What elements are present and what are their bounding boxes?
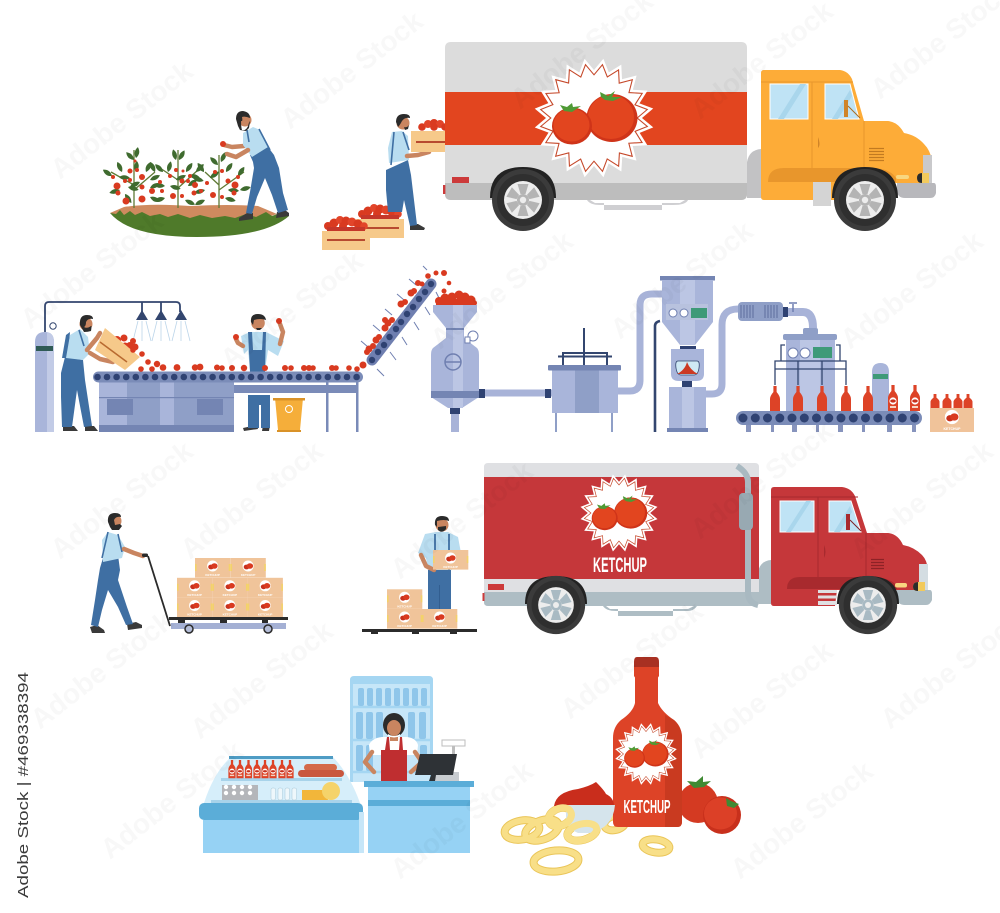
scene: worker stacking boxes — [362, 516, 477, 634]
inclined conveyor — [361, 266, 451, 376]
water bottles — [271, 788, 296, 800]
tomato logo badge — [525, 49, 663, 187]
worker holding box — [418, 516, 461, 610]
loading worker — [386, 114, 429, 230]
adobe stock watermark: Adobe Stock — [385, 755, 539, 885]
crate held by worker — [411, 119, 445, 152]
washing vessel with hopper — [431, 290, 552, 432]
mixing tank — [545, 328, 621, 432]
pallet cart — [169, 617, 288, 633]
tomato logo badge — [574, 468, 664, 558]
adobe stock watermark: Adobe Stock — [685, 635, 839, 765]
cab step — [813, 182, 831, 206]
tomatoes beside bottle — [678, 776, 741, 834]
drinks fridge — [350, 676, 433, 782]
adobe stock watermark: Adobe Stock — [425, 225, 579, 355]
cargo box — [482, 463, 759, 606]
grass — [110, 210, 289, 237]
scene: ketchup bottle with onion rings — [503, 657, 741, 873]
filter unit — [738, 302, 788, 321]
chassis link — [747, 149, 761, 198]
outlet pipe — [479, 390, 552, 396]
product cylinder — [872, 363, 889, 411]
recycling bin — [273, 398, 305, 432]
adobe stock watermark: Adobe Stock — [725, 755, 879, 885]
egg trays — [222, 785, 258, 800]
sorting worker — [233, 314, 284, 431]
truck: grey and orange tomato truck — [443, 42, 936, 231]
tomatoes on incline — [364, 270, 451, 355]
stacked ketchup boxes — [177, 558, 283, 617]
hopper with control panel — [660, 276, 715, 432]
bottle logo badge — [610, 718, 682, 790]
box in hands — [433, 550, 468, 570]
bottle label: KETCHUP — [624, 797, 670, 817]
adobe stock watermark: Adobe Stock — [15, 205, 169, 335]
farmer picking tomatoes — [220, 111, 289, 221]
ketchup label: KETCHUP — [593, 554, 647, 577]
packed ketchup box: KETCHUP — [944, 427, 961, 431]
tilted crate of tomatoes — [95, 328, 140, 370]
adobe stock watermark: Adobe Stock — [45, 55, 199, 185]
water pipe and sprinklers — [45, 302, 190, 341]
conveyor machine base — [99, 382, 234, 432]
adobe stock watermark: Adobe Stock — [835, 225, 989, 355]
worker pulling cart — [90, 513, 170, 633]
stock image id: Adobe Stock | #469338394 — [15, 672, 32, 898]
red cab — [771, 487, 928, 606]
front grille — [919, 564, 928, 590]
scene: tomato field and farmer — [102, 111, 289, 237]
worker emptying crate — [61, 315, 113, 431]
orange cab — [761, 70, 932, 200]
under-body tank — [587, 200, 688, 210]
sausages — [298, 764, 344, 777]
ketchup bottles on shelf — [228, 760, 294, 778]
ketchup bottle — [610, 657, 682, 827]
headlights — [895, 582, 925, 591]
pipes between tanks — [618, 294, 813, 432]
adobe stock watermark: Adobe Stock — [45, 435, 199, 565]
adobe stock watermark: Adobe Stock — [25, 605, 179, 735]
adobe stock watermark: Adobe Stock — [555, 595, 709, 725]
adobe stock watermark: Adobe Stock — [605, 215, 759, 345]
adobe stock watermark: Adobe Stock — [845, 435, 999, 565]
front wheel — [832, 167, 898, 231]
bottles on line — [770, 385, 920, 412]
adobe stock watermark: Adobe Stock — [185, 615, 339, 745]
rear wheel — [490, 167, 556, 231]
under-body tank — [603, 606, 697, 616]
cargo box — [443, 42, 747, 200]
soil bed — [110, 205, 277, 226]
adobe stock watermark: Adobe Stock — [385, 455, 539, 585]
pallet — [362, 629, 477, 634]
sorting conveyor — [93, 314, 366, 432]
tomato plants — [102, 147, 251, 208]
tomatoes on belt — [138, 362, 366, 372]
rear wheel — [525, 576, 587, 634]
adobe stock watermark: Adobe Stock — [215, 245, 369, 375]
bottling conveyor — [736, 411, 922, 432]
front wheel — [837, 576, 899, 634]
chassis link — [758, 560, 771, 604]
scene: worker pulling pallet cart — [90, 513, 288, 633]
gas cylinder — [35, 323, 56, 432]
adobe stock watermark: Adobe Stock — [685, 415, 839, 545]
cheese — [302, 782, 340, 800]
bottling machine — [775, 328, 846, 412]
headlights — [896, 173, 929, 183]
bumper — [897, 183, 936, 198]
packed ketchup box — [930, 394, 974, 432]
onion rings behind bowl — [503, 804, 670, 873]
table frame — [234, 382, 358, 432]
glass display case — [204, 756, 360, 803]
truck: red ketchup truck — [482, 463, 932, 634]
adobe stock watermark: Adobe Stock — [275, 5, 429, 135]
cash register — [415, 740, 465, 781]
conveyor belt with rollers — [93, 372, 363, 382]
scene: worker loading crates into truck — [322, 114, 449, 250]
scene: washing station — [35, 302, 190, 432]
checkout counter — [359, 781, 474, 853]
shop assistant — [365, 713, 422, 781]
cab step — [818, 590, 837, 605]
crate stack on ground — [322, 204, 404, 250]
display counter base — [199, 803, 363, 853]
box stack — [387, 589, 457, 629]
adobe stock watermark: Adobe Stock — [95, 735, 249, 865]
bumper — [897, 590, 932, 605]
front grille — [923, 155, 932, 183]
pile of tomatoes in hopper — [435, 290, 477, 306]
scene: shop counter — [199, 676, 474, 853]
ketchup bowl — [554, 782, 615, 833]
onion ring over bowl — [546, 804, 599, 844]
exhaust stack — [737, 466, 758, 605]
vessel body — [431, 305, 479, 408]
adobe stock watermark: Adobe Stock — [175, 435, 329, 565]
falling tomatoes — [130, 347, 160, 367]
